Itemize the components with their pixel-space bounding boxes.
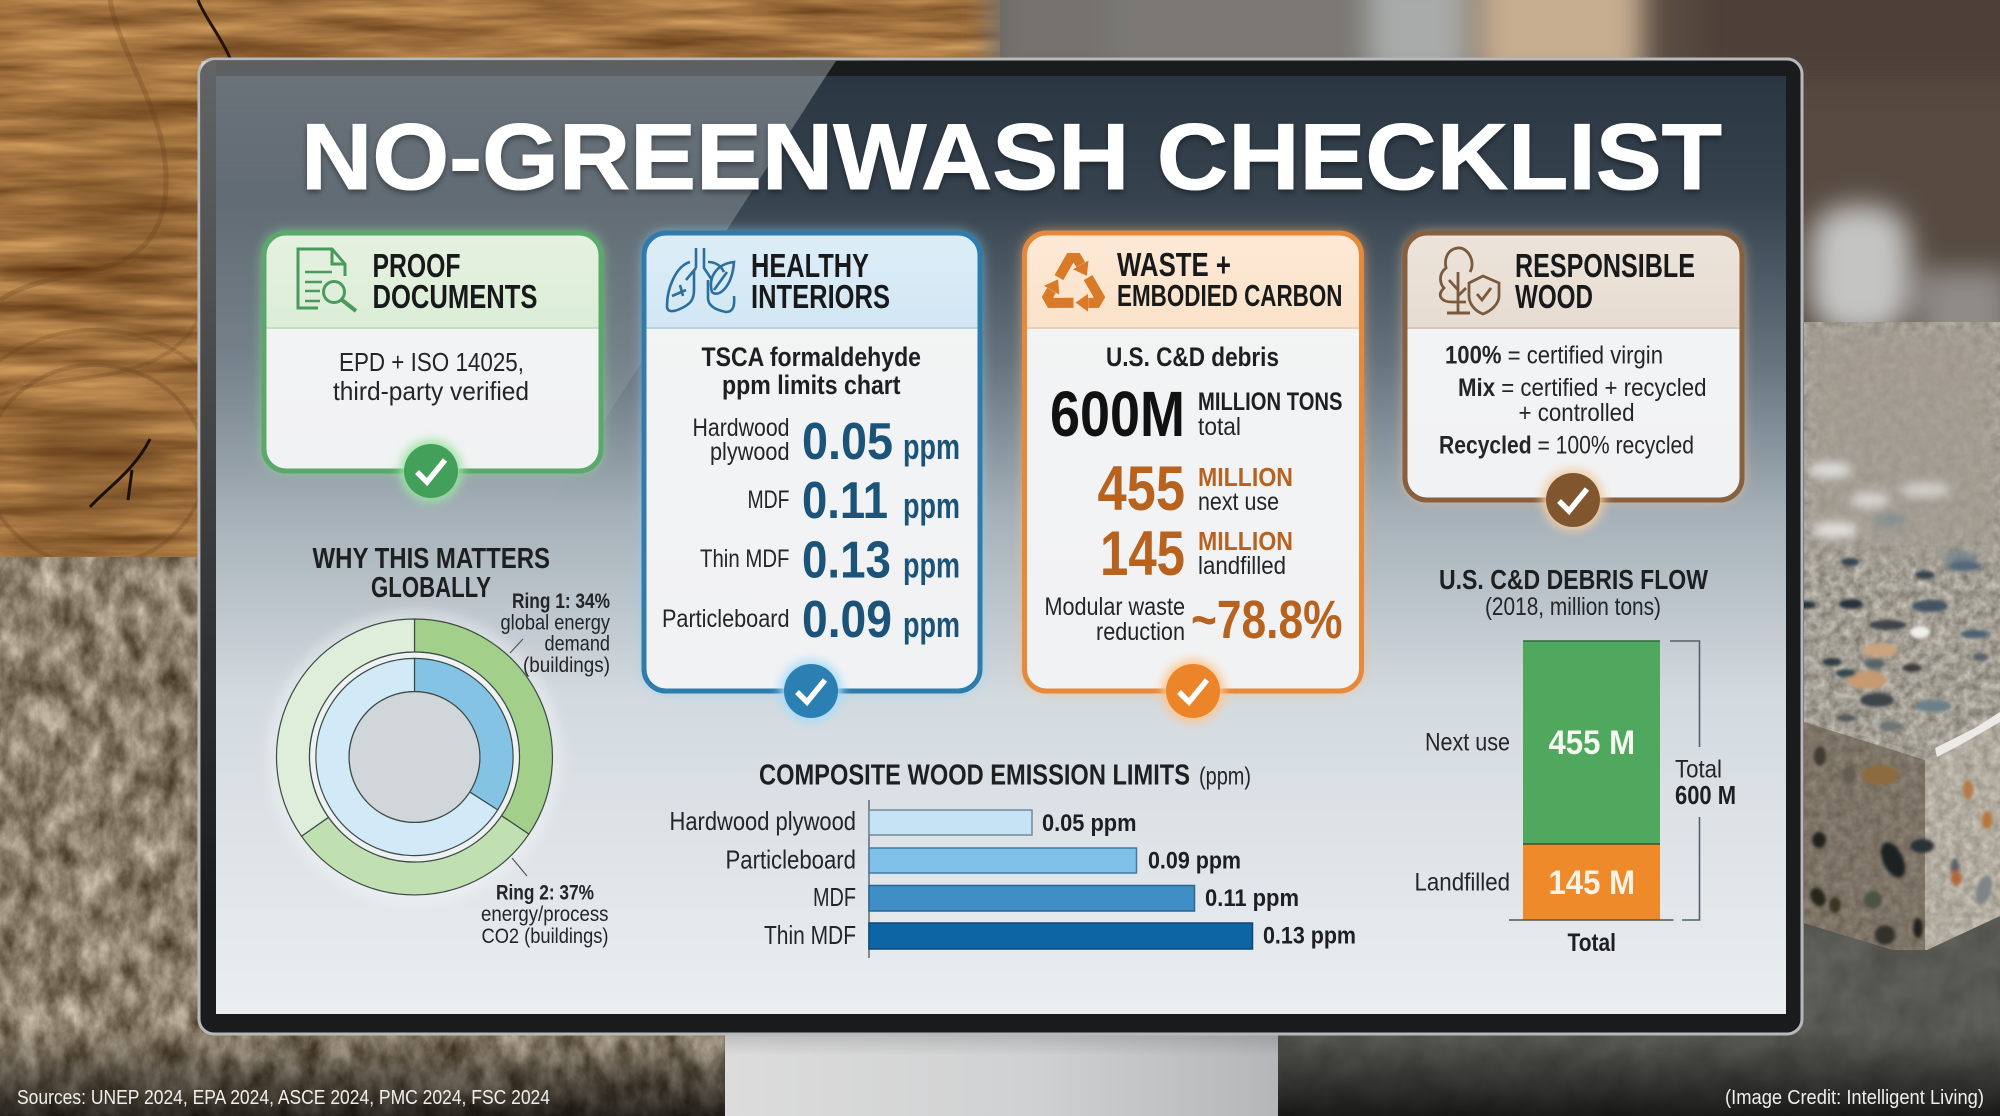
heading: proof documents: PROOF xyxy=(372,247,460,284)
bracket: total xyxy=(1670,641,1736,920)
bar: thin MDF xyxy=(764,920,1356,950)
heading: healthy interiors: INTERIORS xyxy=(751,278,890,315)
bar: hardwood plywood: Hardwood plywood xyxy=(670,806,856,836)
chart: stacked bar xyxy=(1414,641,1736,957)
stat: MDF: 0.11 xyxy=(802,472,888,530)
screen glare xyxy=(201,61,836,911)
panel: proof documents xyxy=(264,233,601,502)
heading: why this matters: WHY THIS MATTERS xyxy=(312,543,550,575)
callout: ring 2 xyxy=(481,858,608,948)
text: TSCA subtitle: ppm limits chart xyxy=(722,370,900,400)
background: wood sample xyxy=(0,0,1000,600)
stat: thin MDF xyxy=(700,532,960,590)
stat: 145 million landfilled: MILLION xyxy=(1198,526,1293,556)
callout: ring 2: energy/process xyxy=(481,903,608,926)
stat: 600M total xyxy=(1050,378,1342,450)
bar: thin MDF: Thin MDF xyxy=(764,920,856,950)
bar segment: next use: 455 M xyxy=(1548,724,1635,762)
text: proof requirement xyxy=(333,347,529,406)
stat: particleboard xyxy=(662,591,960,649)
bar: MDF: 0.11 ppm xyxy=(1205,885,1299,912)
stat: 455 million next use: 455 xyxy=(1098,454,1185,524)
heading: healthy interiors: HEALTHY xyxy=(751,247,869,284)
axis label: total: Total xyxy=(1568,929,1616,957)
panel: why this matters globally xyxy=(266,543,610,948)
callout: ring 1 xyxy=(500,590,610,677)
heading: why this matters xyxy=(312,543,550,604)
stat: particleboard: 0.09 xyxy=(802,591,892,649)
heading: debris flow: (2018, million tons) xyxy=(1485,593,1661,621)
icon: tree with shield xyxy=(1440,248,1499,314)
stat: MDF: ppm xyxy=(903,485,960,526)
icon: document with magnifier xyxy=(298,249,356,311)
bar: hardwood plywood: 0.05 ppm xyxy=(1042,810,1136,837)
heading: bar chart title: COMPOSITE WOOD EMISSION LIMITS xyxy=(759,760,1190,792)
heading: debris flow xyxy=(1439,564,1708,621)
stat: 455 million next use: MILLION xyxy=(1198,462,1293,492)
stat: 145 million landfilled: landfilled xyxy=(1198,552,1286,580)
stat: 455 million next use xyxy=(1098,454,1293,524)
heading: debris flow: U.S. C&D DEBRIS FLOW xyxy=(1439,564,1708,595)
stat: hardwood plywood: plywood xyxy=(710,438,790,466)
heading: proof documents: DOCUMENTS xyxy=(372,278,538,315)
heading: responsible wood: RESPONSIBLE xyxy=(1515,247,1695,284)
bar: particleboard xyxy=(726,844,1241,874)
bar: particleboard: Particleboard xyxy=(726,844,856,874)
text: certification definitions: + controlled xyxy=(1518,399,1634,427)
bar segment: landfilled xyxy=(1414,844,1660,920)
callout: ring 2: CO2 (buildings) xyxy=(482,925,608,948)
callout: ring 1: global energy xyxy=(500,612,610,634)
heading: responsible wood xyxy=(1515,247,1695,315)
stat: hardwood plywood: ppm xyxy=(903,426,960,467)
panel: waste and embodied carbon xyxy=(1024,233,1362,722)
heading: responsible wood: WOOD xyxy=(1515,278,1593,315)
stat: 600M total: 600M xyxy=(1050,378,1185,450)
title: NO-GREENWASH CHECKLIST xyxy=(301,104,1722,209)
heading: waste and embodied carbon xyxy=(1117,246,1342,313)
stat: thin MDF: Thin MDF xyxy=(700,545,790,573)
stat: particleboard: Particleboard xyxy=(662,605,790,633)
stat: thin MDF: 0.13 xyxy=(802,532,891,590)
stat: modular waste reduction: ~78.8% xyxy=(1191,590,1342,650)
stat: 145 million landfilled xyxy=(1100,519,1293,589)
stat: MDF: MDF xyxy=(748,486,790,514)
panel: U.S. C&D debris flow xyxy=(1414,564,1736,957)
bar: MDF: MDF xyxy=(813,882,856,912)
text: TSCA subtitle xyxy=(702,342,921,400)
text: certification definitions xyxy=(1439,342,1706,460)
bar: particleboard: 0.09 ppm xyxy=(1148,848,1241,874)
stat: particleboard: ppm xyxy=(903,604,960,645)
background: concrete floor xyxy=(1278,900,2000,1116)
heading: bar chart title: (ppm) xyxy=(1199,762,1251,790)
bar: thin MDF: 0.13 ppm xyxy=(1263,922,1356,950)
stat: 600M total: MILLION TONS xyxy=(1198,388,1342,416)
background: wool insulation sample xyxy=(0,557,725,1116)
callout: ring 2: Ring 2: 37% xyxy=(496,882,594,904)
bracket: total: 600 M xyxy=(1675,780,1736,810)
bar: hardwood plywood xyxy=(670,806,1136,837)
panel: healthy interiors xyxy=(644,233,980,722)
bar segment: next use: Next use xyxy=(1425,728,1510,756)
icon: green check badge xyxy=(400,440,462,502)
stat: 145 million landfilled: 145 xyxy=(1100,519,1185,589)
heading: proof documents xyxy=(372,247,538,315)
background: blurred room xyxy=(990,0,2000,360)
text: proof requirement: EPD + ISO 14025, xyxy=(339,347,524,377)
panel: composite wood emission limits xyxy=(670,760,1356,958)
heading: healthy interiors xyxy=(751,247,890,315)
stat: modular waste reduction xyxy=(1044,590,1342,650)
background: terrazzo block xyxy=(1804,322,2000,950)
chart: nested donut xyxy=(266,609,562,905)
bar chart xyxy=(670,800,1356,958)
icon: orange check badge xyxy=(1162,660,1224,722)
bar segment: landfilled: 145 M xyxy=(1548,864,1635,902)
stat: 600M total: total xyxy=(1198,413,1241,441)
stat: thin MDF: ppm xyxy=(903,544,960,586)
screen background xyxy=(216,76,1786,1014)
stat: hardwood plywood xyxy=(692,413,960,471)
bar: MDF xyxy=(813,882,1299,912)
bar segment: next use xyxy=(1425,641,1660,844)
heading: waste and embodied carbon: WASTE + xyxy=(1117,246,1231,283)
background: bottom shade xyxy=(0,1030,2000,1116)
bar segment: landfilled: Landfilled xyxy=(1414,868,1510,896)
monitor frame xyxy=(199,59,1802,1034)
heading: waste and embodied carbon: EMBODIED CARBON xyxy=(1117,278,1342,313)
icon: lungs with leaf xyxy=(667,248,734,312)
text: certification definitions: Recycled = 100% recycled xyxy=(1439,432,1694,460)
monitor stand xyxy=(725,1030,1278,1116)
text: certification definitions: 100% = certified virgin xyxy=(1445,342,1663,370)
icon: recycling arrows xyxy=(1042,258,1105,313)
stat: hardwood plywood: Hardwood xyxy=(692,414,790,442)
bracket: total: Total xyxy=(1675,756,1722,784)
stat: MDF xyxy=(748,472,960,530)
footer: image credit: (Image Credit: Intelligent Living) xyxy=(1725,1087,1984,1109)
text: certification definitions: Mix = certified + recycled xyxy=(1458,374,1706,402)
icon: brown check badge xyxy=(1542,469,1604,531)
text: debris subtitle: U.S. C&D debris xyxy=(1106,342,1279,372)
callout: ring 1: demand xyxy=(544,632,610,656)
text: TSCA subtitle: TSCA formaldehyde xyxy=(702,342,921,372)
heading: why this matters: GLOBALLY xyxy=(371,572,491,604)
icon: blue check badge xyxy=(780,660,842,722)
callout: ring 1: (buildings) xyxy=(523,654,610,677)
stat: modular waste reduction: Modular waste xyxy=(1044,593,1185,621)
stat: 455 million next use: next use xyxy=(1198,488,1279,516)
footer: sources: Sources: UNEP 2024, EPA 2024, ASCE 2024, PMC 2024, FSC 2024 xyxy=(17,1087,550,1109)
text: proof requirement: third-party verified xyxy=(333,376,529,406)
stat: hardwood plywood: 0.05 xyxy=(802,413,893,471)
panel: responsible wood xyxy=(1405,233,1742,531)
callout: ring 1: Ring 1: 34% xyxy=(512,590,610,613)
stat: modular waste reduction: reduction xyxy=(1096,618,1185,646)
